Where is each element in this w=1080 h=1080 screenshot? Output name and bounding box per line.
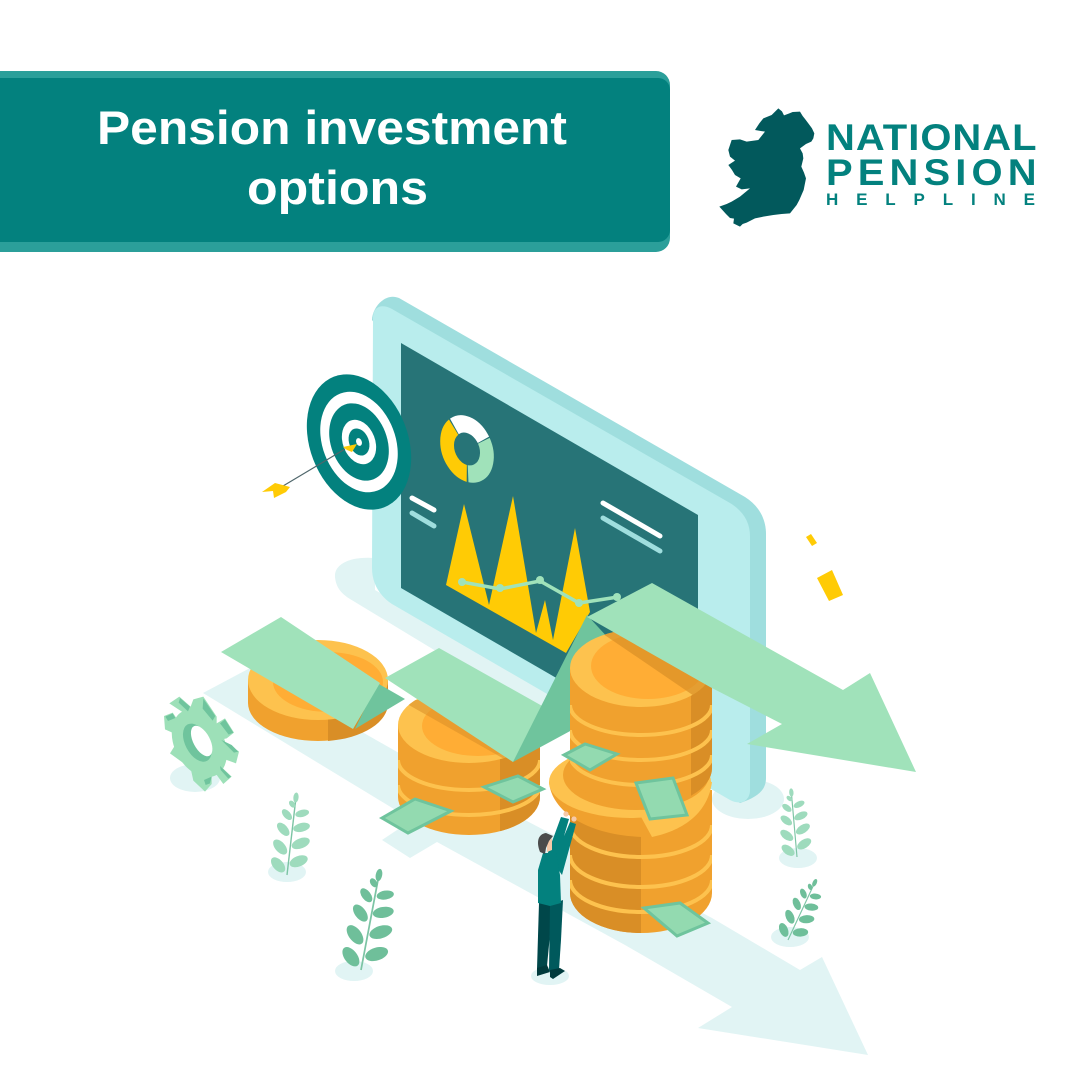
logo word NATIONAL: NATIONAL: [826, 117, 1037, 159]
gear body: [161, 697, 239, 792]
logo: National Pension Helpline: [719, 108, 1037, 227]
monitor shadow: [335, 558, 570, 714]
target with arrow: [262, 359, 430, 525]
coin stack small: [248, 640, 388, 741]
line chart: [458, 576, 621, 607]
screen dashboard: [412, 406, 660, 653]
note 1: [382, 799, 451, 833]
person shadow: [531, 967, 569, 985]
person hands: [563, 811, 577, 822]
coin stack large lower: [568, 780, 712, 935]
monitor back edge: [372, 297, 766, 803]
big coin side: [549, 782, 652, 837]
arrow segment 1: [221, 617, 405, 729]
plant 4: [771, 872, 832, 948]
coin stack medium: [398, 699, 540, 835]
title text: Pension investment: [97, 101, 567, 154]
plant 2: [335, 864, 405, 981]
donut chart: [430, 406, 504, 492]
money notes: [382, 744, 708, 936]
arrow fold: [513, 615, 610, 762]
logo word PENSION: PENSION: [826, 152, 1037, 194]
note 4: [636, 778, 687, 819]
monitor front: [372, 306, 750, 802]
target rings: [288, 359, 430, 525]
note 3: [564, 744, 617, 770]
title banner: [0, 71, 670, 252]
gear hole: [177, 719, 218, 767]
big coin top: [549, 746, 711, 818]
yellow peaks chart: [446, 496, 590, 653]
note 5: [644, 903, 708, 936]
text lines right: [603, 503, 660, 551]
plant 1: [267, 790, 317, 882]
person shoes: [537, 965, 565, 979]
person hair: [538, 833, 553, 854]
person face: [547, 838, 552, 852]
arrow segment 2: [385, 648, 560, 762]
gear: [161, 697, 239, 792]
icon: map of Ireland: [719, 108, 814, 227]
arrow segment 3 with head: [587, 583, 916, 772]
ground arrow shadow: [203, 668, 868, 1055]
note 2: [484, 776, 543, 802]
arrow head: [343, 444, 357, 452]
arrow shaft: [278, 449, 345, 489]
gear shadow: [170, 764, 220, 792]
big coin tail: [640, 778, 712, 837]
monitor screen: [401, 343, 698, 760]
text lines left: [412, 498, 434, 526]
big coin: [549, 740, 712, 837]
person arms: [546, 817, 576, 875]
monitor base shadow: [712, 779, 784, 819]
arrow fletching: [262, 483, 290, 498]
logo word HELPLINE: HELPLINE: [826, 190, 1035, 209]
big coin inner shadow: [563, 740, 709, 810]
title text second line: options: [247, 161, 428, 214]
person torso: [538, 853, 561, 906]
gear hub: [161, 700, 238, 787]
coin stack large upper: [570, 632, 712, 796]
monitor: [372, 297, 766, 803]
gear tooth shading: [165, 698, 238, 785]
yellow accents: [806, 534, 843, 601]
person: [531, 811, 577, 985]
person legs: [537, 900, 563, 971]
plant 3: [774, 787, 817, 868]
